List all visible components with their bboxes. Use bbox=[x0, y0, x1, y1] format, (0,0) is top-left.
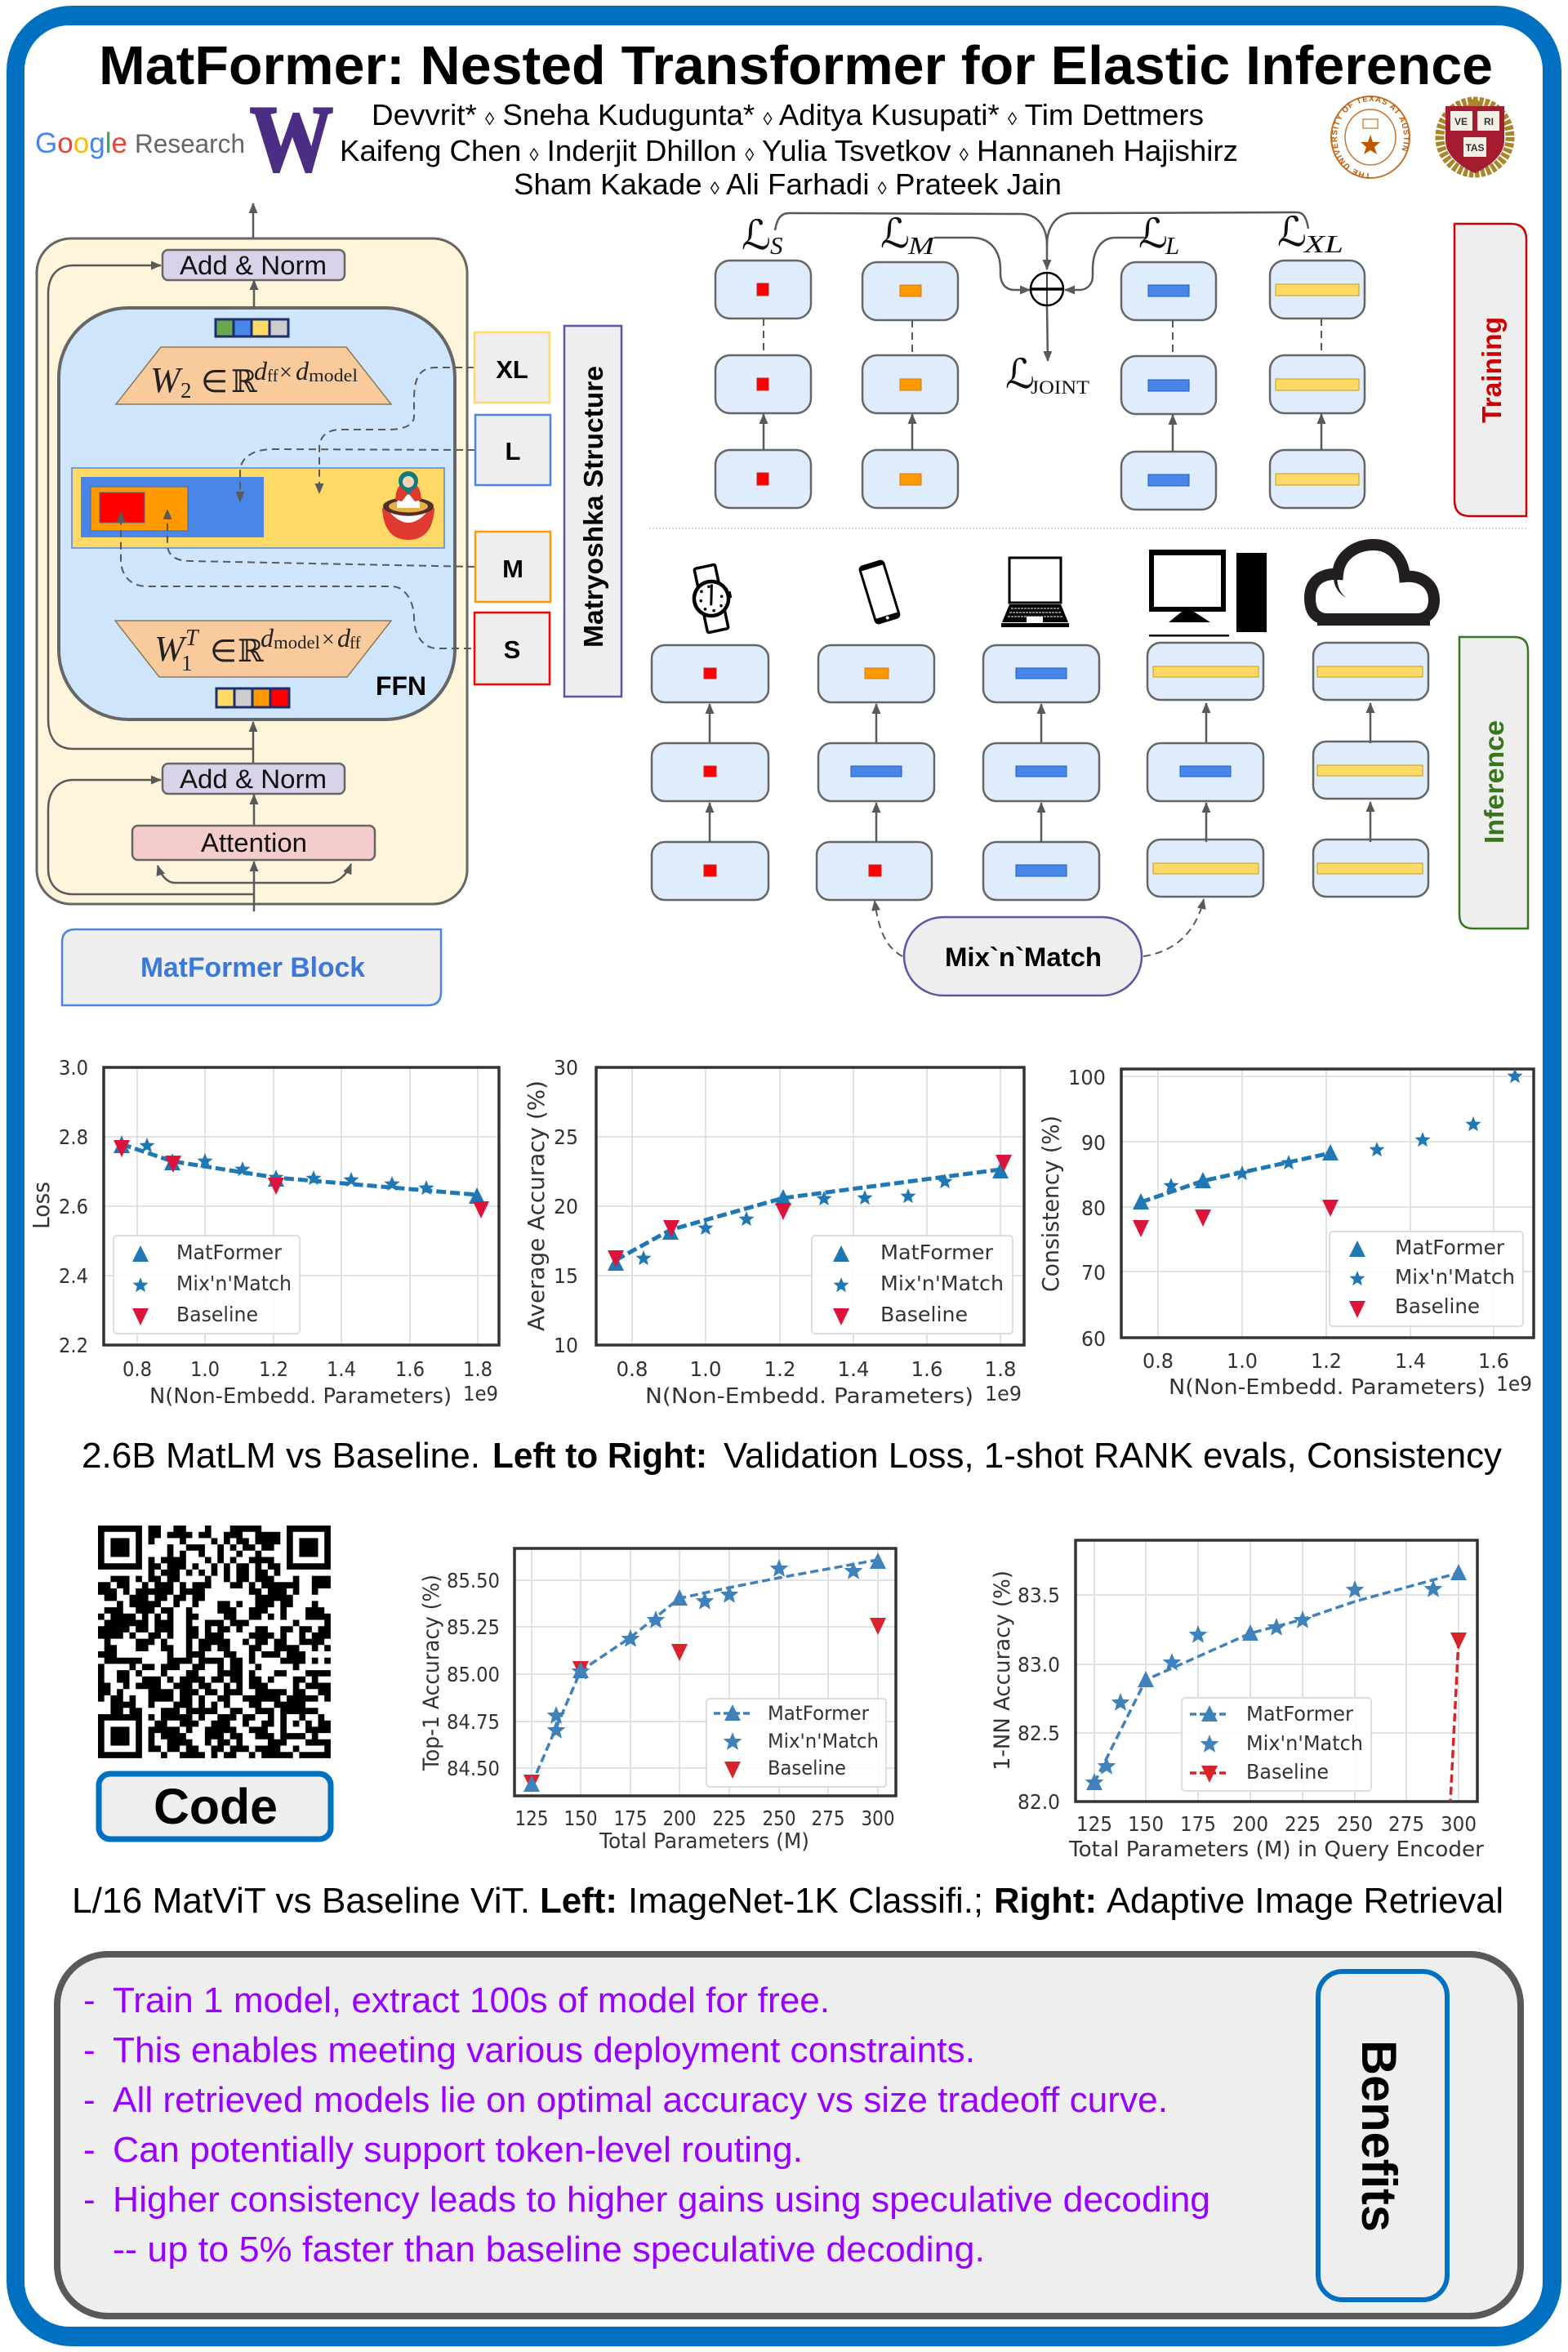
bar: input activations bbox=[216, 688, 289, 707]
chart: validation loss: 1.0 bbox=[190, 1357, 220, 1381]
column desktop blocks bbox=[1147, 643, 1263, 897]
label: Benefits: Benefits bbox=[1352, 2040, 1406, 2232]
matrix W2 trapezoid: d bbox=[254, 356, 268, 385]
size selector: M bbox=[475, 532, 550, 602]
legend: Mix'n'Match bbox=[768, 1730, 879, 1753]
chart: image retrieval accuracy: 175 bbox=[1180, 1812, 1216, 1836]
logo: Harvard shield bbox=[1440, 96, 1510, 173]
arrow: loss M to sum bbox=[934, 238, 1030, 290]
column watch blocks bbox=[652, 645, 768, 900]
column phone blocks bbox=[817, 645, 934, 900]
column L blocks bbox=[1121, 262, 1216, 510]
chart: consistency: 80 bbox=[1081, 1196, 1106, 1220]
benefits list: - bbox=[83, 2130, 96, 2170]
loss labels: ℒ bbox=[1277, 208, 1307, 256]
benefits list: Higher consistency leads to higher gains using speculative decoding bbox=[113, 2180, 1210, 2220]
column XL blocks bbox=[1270, 261, 1365, 508]
chart: consistency: 1.6 bbox=[1478, 1349, 1509, 1373]
chart: average accuracy: 0.8 bbox=[616, 1357, 648, 1381]
legend: MatFormer bbox=[176, 1241, 283, 1264]
arrow: loss S to sum bbox=[775, 213, 1047, 270]
chart: average accuracy: 30 bbox=[554, 1056, 578, 1080]
logo: University of Texas seal: THE UNIVERSITY OF TEXAS AT AUSTIN bbox=[1331, 96, 1410, 179]
chart: image retrieval accuracy: 150 bbox=[1128, 1812, 1164, 1836]
nested weight matrix bbox=[72, 468, 444, 548]
arrow: skip connection around FFN bbox=[48, 265, 254, 749]
loss labels: M bbox=[907, 231, 937, 260]
chart: ImageNet top-1 accuracy: 85.25 bbox=[447, 1615, 500, 1639]
matrix W2 trapezoid: 2 bbox=[180, 378, 191, 403]
benefits list bbox=[83, 1980, 1210, 2270]
arrow: S mapping bbox=[121, 512, 471, 648]
icon: phone bbox=[859, 560, 900, 624]
chart: validation loss: 3.0 bbox=[59, 1056, 88, 1080]
caption: MatViT results: Right: bbox=[994, 1881, 1097, 1921]
chart: consistency: Consistency (%) bbox=[1037, 1116, 1064, 1292]
box: Attention bbox=[132, 826, 375, 860]
matrix W2 trapezoid: ℝ bbox=[231, 363, 257, 399]
panel: cream block background bbox=[37, 238, 467, 904]
chart: image retrieval accuracy: 82.0 bbox=[1018, 1790, 1060, 1814]
arrow: attention branch left bbox=[158, 866, 254, 883]
label: Training bbox=[1454, 224, 1526, 516]
label: Benefits bbox=[1318, 1971, 1447, 2300]
arrow: FFN to Add & Norm bbox=[253, 280, 255, 307]
icon: matryoshka doll bbox=[382, 471, 434, 540]
chart: average accuracy: 1e9 bbox=[985, 1382, 1022, 1405]
QR code bbox=[98, 1529, 331, 1755]
loss labels: ℒ bbox=[742, 212, 771, 259]
size selector: XL: XL bbox=[496, 355, 528, 384]
arrow: input to attention bbox=[253, 862, 255, 911]
chart: validation loss: 2.6 bbox=[59, 1195, 88, 1218]
chart: image retrieval accuracy: 82.5 bbox=[1018, 1722, 1060, 1745]
chart: image retrieval accuracy: 225 bbox=[1285, 1812, 1321, 1836]
legend: Baseline bbox=[176, 1303, 258, 1326]
chart: validation loss: 1.2 bbox=[259, 1357, 288, 1381]
chart: image retrieval accuracy: 250 bbox=[1337, 1812, 1373, 1836]
label: MatFormer Block: MatFormer Block bbox=[140, 952, 365, 983]
column laptop blocks bbox=[983, 645, 1099, 900]
arrow: loss XL to sum bbox=[1047, 212, 1308, 245]
logo: Google Research bbox=[35, 127, 245, 159]
chart: average accuracy: 10 bbox=[554, 1334, 578, 1357]
logo: Google Research: Research bbox=[135, 129, 245, 158]
label: Training: Training bbox=[1477, 317, 1507, 423]
chart: ImageNet top-1 accuracy: 300 bbox=[861, 1806, 895, 1830]
caption: MatLM results: Validation Loss, 1-shot RANK evals, Consistency bbox=[724, 1436, 1502, 1476]
arrow: M mapping bbox=[167, 510, 475, 567]
loss labels: L bbox=[1165, 231, 1179, 260]
arrow: attention branch right bbox=[254, 864, 351, 883]
icon: laptop bbox=[1001, 558, 1069, 627]
arrow: mix'n'match right bbox=[1143, 899, 1204, 956]
legend bbox=[706, 1699, 886, 1787]
legend: Mix'n'Match bbox=[1246, 1731, 1363, 1755]
legend: Mix'n'Match bbox=[880, 1272, 1004, 1295]
chart: average accuracy: 1.2 bbox=[764, 1357, 795, 1381]
legend bbox=[114, 1236, 300, 1334]
legend: MatFormer bbox=[1246, 1702, 1354, 1726]
chart: validation loss: 0.8 bbox=[122, 1357, 152, 1381]
column M blocks bbox=[862, 262, 958, 508]
caption: MatLM results: 2.6B MatLM vs Baseline. bbox=[82, 1436, 480, 1476]
authors: Kaifeng Chen ◊ Inderjit Dhillon ◊ Yulia Tsvetkov ◊ Hannaneh Hajishirz bbox=[340, 134, 1238, 167]
benefits list: - bbox=[83, 2030, 96, 2070]
caption: MatViT results: ImageNet-1K Classifi.; bbox=[628, 1881, 983, 1921]
matrix W1 trapezoid: model bbox=[274, 632, 320, 653]
chart: average accuracy: 1.4 bbox=[838, 1357, 869, 1381]
box: Attention: Attention bbox=[201, 828, 307, 858]
matrix W1 trapezoid: T bbox=[185, 626, 200, 651]
chart: validation loss: N(Non-Embedd. Parameters) bbox=[149, 1384, 452, 1409]
chart: ImageNet top-1 accuracy: 175 bbox=[614, 1806, 647, 1830]
chart: validation loss: 1e9 bbox=[463, 1382, 498, 1405]
column cloud blocks bbox=[1313, 643, 1428, 897]
icon: desktop computer bbox=[1149, 550, 1267, 637]
chart: average accuracy: 25 bbox=[554, 1125, 578, 1149]
label: Inference bbox=[1459, 637, 1528, 929]
chart: validation loss: Loss bbox=[28, 1182, 55, 1229]
box: lower Add & Norm: Add & Norm bbox=[180, 764, 327, 794]
chart: consistency: 0.8 bbox=[1143, 1349, 1174, 1373]
legend: Baseline bbox=[1395, 1294, 1480, 1318]
logo: University of Washington W: W bbox=[250, 87, 333, 192]
chart: image retrieval accuracy bbox=[990, 1540, 1484, 1862]
benefits list: This enables meeting various deployment constraints. bbox=[113, 2030, 975, 2070]
benefits list: Can potentially support token-level routing. bbox=[113, 2130, 803, 2170]
chart: ImageNet top-1 accuracy bbox=[419, 1548, 896, 1854]
loss labels: S bbox=[770, 231, 782, 260]
chart: validation loss: 2.4 bbox=[59, 1264, 88, 1288]
label: FFN: FFN bbox=[376, 671, 426, 701]
caption: MatViT results: Left: bbox=[540, 1881, 617, 1921]
bar: output activations bbox=[216, 319, 288, 336]
arrow: Add & Norm to FFN bbox=[252, 722, 254, 764]
chart: average accuracy: Average Accuracy (%) bbox=[523, 1080, 550, 1331]
legend: MatFormer bbox=[880, 1241, 994, 1264]
matrix W2 trapezoid bbox=[116, 347, 391, 404]
arrow: mix'n'match left bbox=[875, 901, 902, 956]
caption: MatViT results: Adaptive Image Retrieval bbox=[1107, 1881, 1503, 1921]
loss labels: XL bbox=[1302, 229, 1343, 258]
chart: average accuracy: 1.6 bbox=[911, 1357, 942, 1381]
legend: Baseline bbox=[880, 1303, 968, 1326]
chart: consistency: 100 bbox=[1068, 1066, 1106, 1089]
chart: ImageNet top-1 accuracy: Total Parameters (M) bbox=[599, 1829, 809, 1854]
arrow: L mapping bbox=[240, 449, 475, 501]
chart: consistency bbox=[1037, 1066, 1534, 1400]
matrix W1 trapezoid: ff bbox=[350, 633, 361, 653]
size selector: S: S bbox=[504, 635, 520, 664]
chart: average accuracy bbox=[523, 1056, 1024, 1409]
chart: consistency: 70 bbox=[1081, 1261, 1106, 1285]
chart: ImageNet top-1 accuracy: 84.50 bbox=[447, 1757, 500, 1780]
benefits list: All retrieved models lie on optimal accuracy vs size tradeoff curve. bbox=[113, 2080, 1168, 2120]
loss labels: ℒ bbox=[880, 210, 910, 257]
legend: Mix'n'Match bbox=[176, 1272, 292, 1295]
chart: image retrieval accuracy: 275 bbox=[1388, 1812, 1424, 1836]
arrow: attention to Add & Norm bbox=[253, 795, 255, 826]
box: top Add & Norm: Add & Norm bbox=[180, 251, 327, 280]
chart: ImageNet top-1 accuracy: 150 bbox=[564, 1806, 598, 1830]
chart: ImageNet top-1 accuracy: Top-1 Accuracy (%) bbox=[419, 1575, 444, 1771]
caption: MatLM results bbox=[82, 1436, 1502, 1476]
benefits list: - bbox=[83, 1980, 96, 2020]
chart: validation loss: 1.8 bbox=[463, 1357, 492, 1381]
legend: MatFormer bbox=[768, 1702, 869, 1725]
chart: ImageNet top-1 accuracy: 85.00 bbox=[447, 1663, 500, 1686]
matrix W1 trapezoid: 1 bbox=[181, 651, 193, 675]
chart: average accuracy: 20 bbox=[554, 1195, 578, 1218]
button: Code: Code bbox=[154, 1779, 278, 1834]
column S blocks bbox=[715, 261, 811, 508]
matrix W1 trapezoid: W bbox=[154, 629, 187, 669]
caption: MatViT results bbox=[72, 1881, 1503, 1921]
legend: MatFormer bbox=[1395, 1236, 1505, 1259]
legend bbox=[812, 1236, 1013, 1334]
panel: benefits bbox=[57, 1954, 1521, 2316]
panel: MatFormer block diagram bbox=[37, 203, 475, 911]
matrix W2 trapezoid: ∈ bbox=[201, 365, 228, 399]
chart: validation loss bbox=[28, 1056, 499, 1409]
loss labels: ℒ bbox=[1138, 210, 1168, 257]
matrix W1 trapezoid: ℝ bbox=[238, 633, 264, 669]
title: MatFormer: Nested Transformer for Elastic Inference bbox=[99, 35, 1493, 96]
matrix W2 trapezoid: model bbox=[309, 365, 358, 385]
authors: Devvrit* ◊ Sneha Kudugunta* ◊ Aditya Kusupati* ◊ Tim Dettmers bbox=[372, 98, 1204, 131]
arrow: sum to joint loss bbox=[1047, 306, 1048, 361]
logo: Harvard shield: RI bbox=[1484, 116, 1494, 127]
size selector: L bbox=[475, 415, 550, 485]
chart: average accuracy: N(Non-Embedd. Parameters) bbox=[645, 1384, 973, 1409]
box: Mix`n`Match: Mix`n`Match bbox=[945, 942, 1102, 972]
chart: consistency: 1e9 bbox=[1496, 1372, 1532, 1396]
size selector: XL bbox=[474, 332, 550, 403]
chart: image retrieval accuracy: 83.5 bbox=[1018, 1584, 1060, 1607]
matrix W1 trapezoid: ∈ bbox=[210, 635, 237, 669]
chart: consistency: 1.4 bbox=[1395, 1349, 1426, 1373]
box: Mix`n`Match bbox=[904, 917, 1142, 996]
panel: FFN bbox=[59, 308, 455, 719]
logo: Google Research: Google bbox=[35, 127, 127, 159]
icon: cloud bbox=[1310, 545, 1434, 626]
chart: validation loss: 2.2 bbox=[59, 1334, 88, 1357]
chart: ImageNet top-1 accuracy: 250 bbox=[763, 1806, 795, 1830]
arrow: block output bbox=[252, 203, 254, 250]
logo: Harvard shield: TAS bbox=[1465, 142, 1485, 154]
legend bbox=[1330, 1232, 1523, 1326]
chart: image retrieval accuracy: 1-NN Accuracy (%) bbox=[990, 1570, 1015, 1771]
arrow: skip connection around attention bbox=[48, 780, 254, 894]
label: Inference: Inference bbox=[1479, 720, 1509, 844]
panel: inference diagram bbox=[652, 643, 1428, 996]
arrow: loss L to sum bbox=[1065, 238, 1145, 290]
chart: validation loss: 2.8 bbox=[59, 1125, 88, 1149]
chart: consistency: 1.2 bbox=[1311, 1349, 1342, 1373]
matrix W2 trapezoid: d bbox=[296, 356, 310, 385]
size selector: S bbox=[474, 612, 550, 684]
chart: ImageNet top-1 accuracy: 200 bbox=[663, 1806, 696, 1830]
loss labels bbox=[742, 208, 1343, 398]
divider bbox=[649, 528, 1528, 529]
legend: Mix'n'Match bbox=[1395, 1265, 1515, 1289]
chart: image retrieval accuracy: 300 bbox=[1441, 1812, 1477, 1836]
chart: image retrieval accuracy: 125 bbox=[1076, 1812, 1112, 1836]
chart: ImageNet top-1 accuracy: 275 bbox=[812, 1806, 844, 1830]
matrix W1 trapezoid: × bbox=[322, 627, 335, 653]
label: Matryoshka Structure bbox=[564, 326, 621, 697]
size selector: M: M bbox=[502, 555, 523, 583]
chart: consistency: 1.0 bbox=[1227, 1349, 1258, 1373]
chart: ImageNet top-1 accuracy: 125 bbox=[514, 1806, 549, 1830]
matrix W1 trapezoid: d bbox=[337, 623, 351, 653]
loss labels: ℒ bbox=[1005, 350, 1035, 398]
label: MatFormer Block bbox=[62, 929, 441, 1005]
chart: image retrieval accuracy: 200 bbox=[1232, 1812, 1268, 1836]
icon: sum operator bbox=[1031, 273, 1063, 305]
benefits list: - bbox=[83, 2080, 96, 2120]
chart: ImageNet top-1 accuracy: 225 bbox=[712, 1806, 746, 1830]
chart: average accuracy: 1.0 bbox=[689, 1357, 722, 1381]
chart: consistency: 90 bbox=[1081, 1131, 1106, 1155]
chart: ImageNet top-1 accuracy: 85.50 bbox=[447, 1569, 500, 1592]
chart: image retrieval accuracy: 83.0 bbox=[1018, 1653, 1060, 1677]
chart: consistency: 60 bbox=[1081, 1327, 1106, 1351]
size selector: L: L bbox=[506, 437, 520, 466]
loss labels: JOINT bbox=[1031, 377, 1089, 398]
chart: ImageNet top-1 accuracy: 84.75 bbox=[447, 1710, 500, 1734]
matrix W2 trapezoid: ff bbox=[267, 366, 278, 385]
authors bbox=[340, 98, 1238, 201]
chart: average accuracy: 1.8 bbox=[985, 1357, 1016, 1381]
benefits list: Train 1 model, extract 100s of model for free. bbox=[113, 1980, 830, 2020]
legend: Baseline bbox=[768, 1757, 846, 1780]
benefits list: - bbox=[83, 2180, 96, 2220]
caption: MatViT results: L/16 MatViT vs Baseline ViT. bbox=[72, 1881, 530, 1921]
matrix W1 trapezoid: d bbox=[261, 623, 274, 653]
chart: average accuracy: 15 bbox=[554, 1264, 578, 1288]
panel: training diagram bbox=[715, 208, 1365, 510]
logo: Harvard shield: VE bbox=[1454, 116, 1468, 127]
matrix W1 trapezoid bbox=[115, 621, 391, 677]
chart: validation loss: 1.6 bbox=[395, 1357, 425, 1381]
matrix W2 trapezoid: × bbox=[279, 360, 292, 385]
label: Matryoshka Structure: Matryoshka Structure bbox=[578, 366, 608, 648]
chart: validation loss: 1.4 bbox=[327, 1357, 356, 1381]
arrow: XL mapping bbox=[319, 368, 474, 493]
button: Code bbox=[99, 1774, 331, 1839]
chart: image retrieval accuracy: Total Parameters (M) in Query Encoder bbox=[1068, 1838, 1484, 1862]
benefits list: -- up to 5% faster than baseline speculative decoding. bbox=[113, 2230, 985, 2270]
icon: watch bbox=[688, 563, 738, 634]
caption: MatLM results: Left to Right: bbox=[492, 1436, 707, 1476]
legend: Baseline bbox=[1246, 1760, 1329, 1784]
chart: consistency: N(Non-Embedd. Parameters) bbox=[1169, 1375, 1486, 1400]
legend bbox=[1182, 1698, 1371, 1791]
authors: Sham Kakade ◊ Ali Farhadi ◊ Prateek Jain bbox=[514, 167, 1062, 201]
matrix W2 trapezoid: W bbox=[150, 360, 183, 400]
